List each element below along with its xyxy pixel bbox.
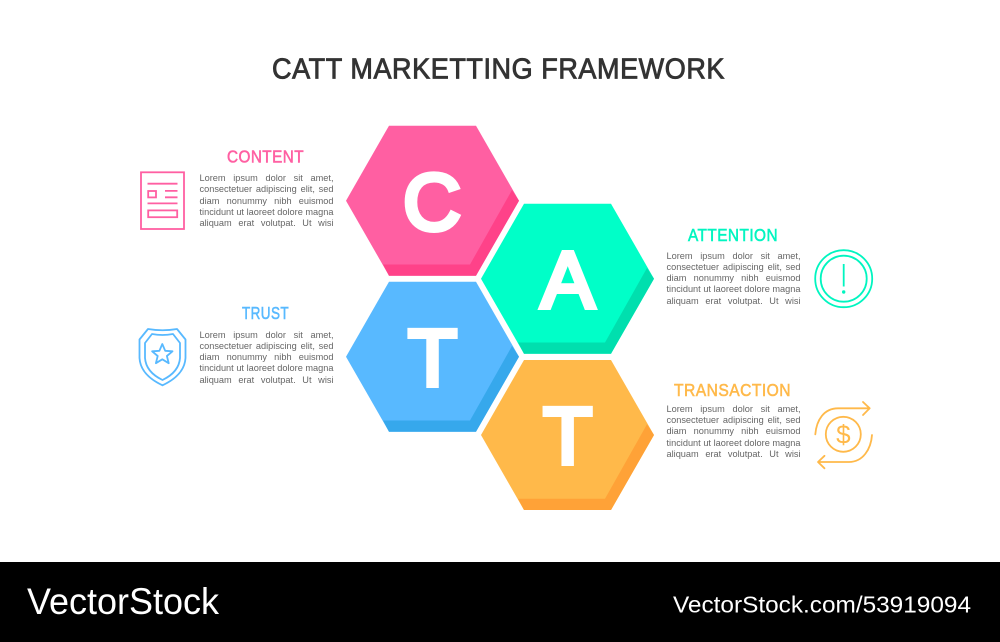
icon: shield with star <box>140 329 186 385</box>
panel: content <box>140 147 334 230</box>
text block: transaction <box>666 404 800 459</box>
icon: document <box>141 172 184 229</box>
text block: attention: Lorem ipsum dolor sit amet, <box>666 250 800 260</box>
heading: content: CONTENT <box>227 147 304 167</box>
heading: attention: ATTENTION <box>688 225 778 245</box>
text block: transaction: tincidunt ut laoreet dolore magna <box>666 438 800 448</box>
text block: attention: consectetuer adipiscing elit, sed <box>666 262 800 272</box>
footer: logo and image id: VectorStock <box>27 581 220 622</box>
text block: attention: diam nonummy nibh euismod <box>666 273 800 283</box>
footer: logo and image id <box>27 581 971 622</box>
text block: content: tincidunt ut laoreet dolore magna <box>200 207 334 217</box>
text block: trust: diam nonummy nibh euismod <box>200 352 334 362</box>
text block: content: aliquam erat volutpat. Ut wisi <box>200 218 334 228</box>
text block: attention: aliquam erat volutpat. Ut wisi <box>666 296 800 306</box>
text block: transaction: consectetuer adipiscing elit, sed <box>666 415 800 425</box>
hexagon: A attention <box>481 204 654 354</box>
panel: trust <box>138 303 334 386</box>
icon: exclamation circle <box>815 250 872 307</box>
text block: transaction: aliquam erat volutpat. Ut wisi <box>666 449 800 459</box>
text block: transaction: Lorem ipsum dolor sit amet, <box>666 404 800 414</box>
text block: transaction: diam nonummy nibh euismod <box>666 426 800 436</box>
footer bar <box>0 562 1000 642</box>
text block: trust: consectetuer adipiscing elit, sed <box>200 341 334 351</box>
footer: logo and image id: VectorStock.com/53919094 <box>673 591 971 617</box>
hexagon: C content: C <box>403 157 461 246</box>
icon: money exchange <box>815 402 872 468</box>
text block: attention: tincidunt ut laoreet dolore magna <box>666 284 800 294</box>
text block: content: Lorem ipsum dolor sit amet, <box>200 173 334 183</box>
hexagon: T transaction <box>481 360 654 510</box>
text block: attention <box>666 250 800 306</box>
text block: trust: Lorem ipsum dolor sit amet, <box>200 330 334 340</box>
hexagon: T transaction: T <box>543 392 592 480</box>
text block: trust: aliquam erat volutpat. Ut wisi <box>200 375 334 385</box>
text block: content <box>200 173 334 228</box>
text block: content: consectetuer adipiscing elit, sed <box>200 184 334 194</box>
hexagon: C content <box>346 126 519 276</box>
hexagon: T trust: T <box>408 314 457 402</box>
heading: transaction: TRANSACTION <box>674 380 791 400</box>
panel: attention <box>666 225 874 308</box>
heading: trust: TRUST <box>242 303 289 323</box>
text block: trust: tincidunt ut laoreet dolore magna <box>200 363 334 373</box>
hexagon: T trust <box>346 282 519 432</box>
hexagon diagram <box>346 126 654 510</box>
hexagon: A attention: A <box>541 236 595 324</box>
text block: trust <box>200 330 334 385</box>
panel: transaction <box>666 380 873 470</box>
text block: content: diam nonummy nibh euismod <box>200 196 334 206</box>
icon: money exchange: $ <box>836 420 851 450</box>
